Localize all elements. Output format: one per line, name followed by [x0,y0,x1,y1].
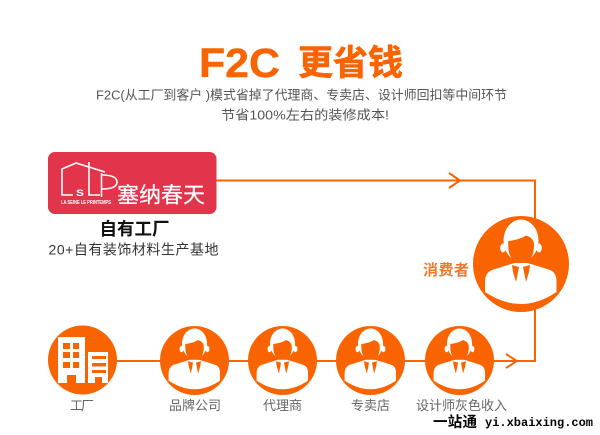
watermark [433,414,593,431]
logo Chinese name: 塞纳春天 [117,184,205,208]
consumer label: 消费者 [423,261,469,279]
title: F2C [199,40,280,86]
logo house mark [62,162,117,197]
logo: 塞纳春天 [48,152,216,214]
watermark: 一站通 [433,414,478,431]
watermark: yi.xbaixing.com [485,416,593,430]
step labels: 专卖店 [351,398,390,413]
icon: consumer [473,216,569,312]
own factory description: 20+自有装饰材料生产基地 [48,242,218,258]
icon: designer [425,326,494,395]
description text: 节省100%左右的装修成本! [221,108,389,122]
logo small caption: LA SEINE LE PRINTEMPS [61,200,112,206]
title [199,40,403,86]
icon: retail store [336,326,405,395]
connector lines [100,173,535,368]
icon: agent [248,326,317,395]
step labels: 设计师灰色收入 [416,398,507,413]
step labels: 品牌公司 [169,398,221,413]
heading: own factory: 自有工厂 [100,219,170,239]
description text: F2C(从工厂到客户 )模式省掉了代理商、专卖店、设计师回扣等中间环节 [96,88,507,102]
title: 更省钱 [298,44,403,83]
icon: brand company [160,326,229,395]
icon: factory [48,326,117,394]
step labels: 工厂 [70,398,94,413]
step labels [70,398,507,413]
logo letter S: S [76,188,84,198]
step labels: 代理商 [263,398,302,413]
description text [96,88,507,122]
